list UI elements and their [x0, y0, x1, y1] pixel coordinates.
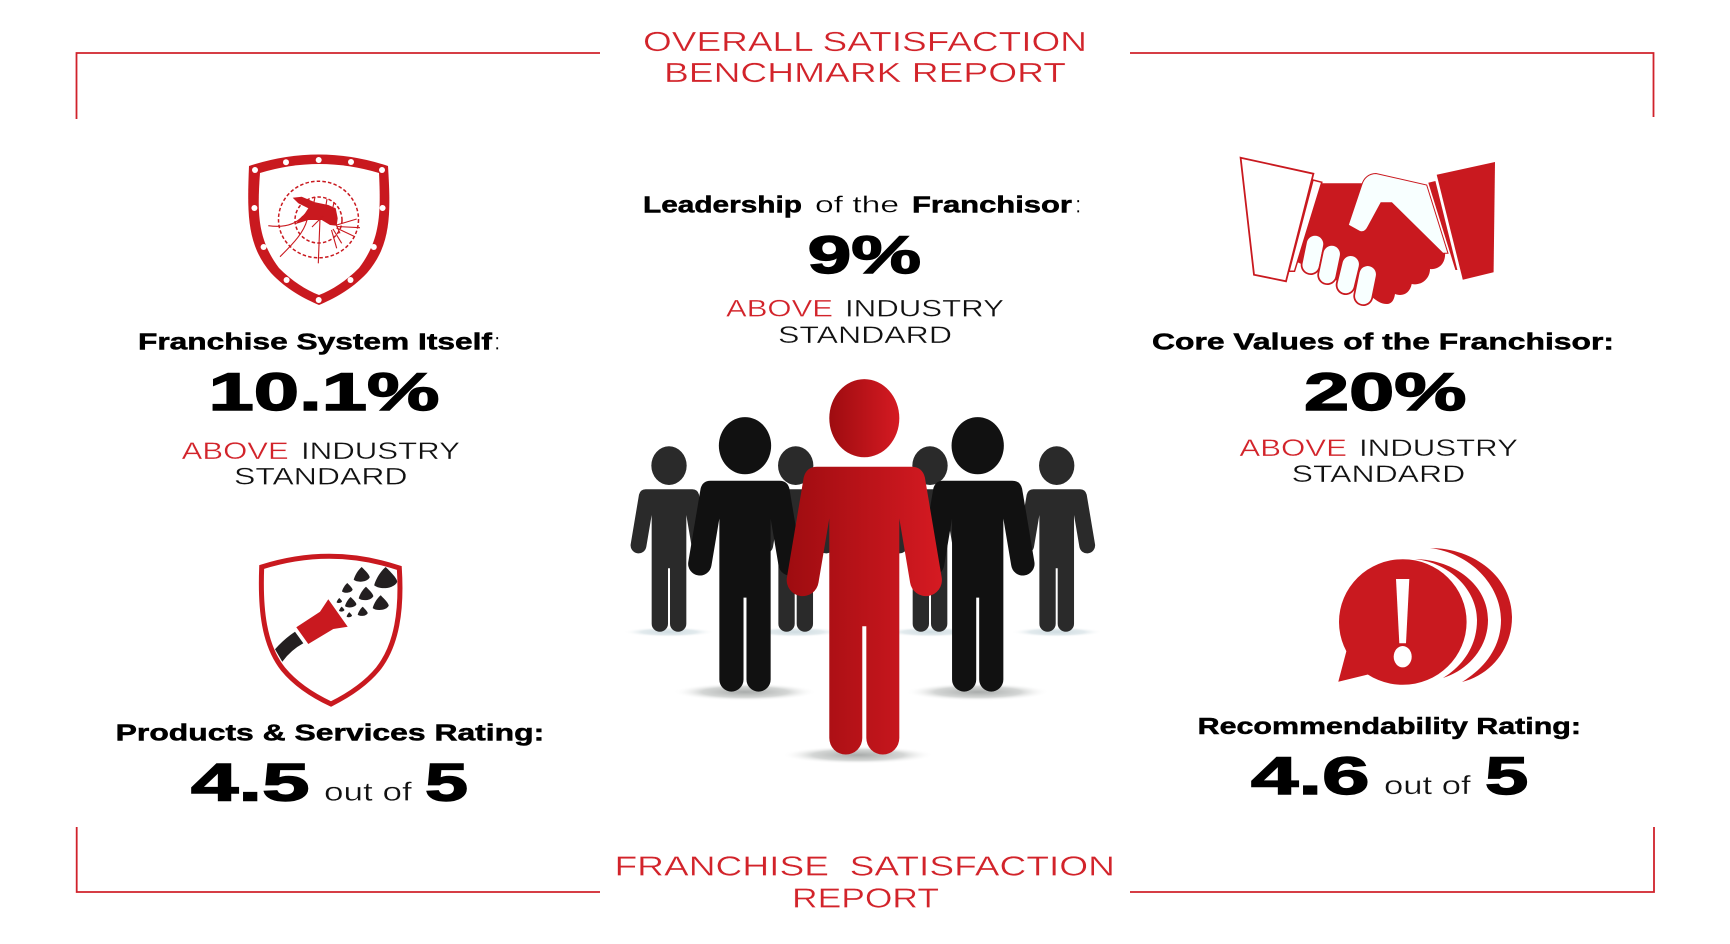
stat: core values of the franchisor: 20% — [1304, 363, 1466, 422]
stat: recommendability rating: out of — [1384, 770, 1472, 800]
title: overall satisfaction benchmark report — [643, 26, 1087, 88]
title: overall satisfaction benchmark report: BENCHMARK REPORT — [664, 57, 1066, 88]
stat: leadership of the franchisor: 9% — [808, 226, 921, 285]
stat: products and services rating: out of — [324, 776, 413, 806]
icon: handshake — [1241, 158, 1495, 304]
footer title: franchise satisfaction report: FRANCHISE SATISFACTION — [614, 851, 1115, 882]
footer title: franchise satisfaction report: REPORT — [792, 883, 939, 914]
stat: recommendability rating: 5 — [1485, 747, 1528, 806]
title: overall satisfaction benchmark report: OVERALL SATISFACTION — [643, 26, 1087, 57]
stat: core values of the franchisor: INDUSTRY — [1359, 435, 1518, 462]
stat: franchise system itself — [138, 328, 500, 490]
footer title: franchise satisfaction report — [614, 851, 1115, 914]
stat: recommendability rating — [1198, 713, 1581, 806]
stat: franchise system itself: 10.1% — [208, 363, 440, 422]
stat: leadership of the franchisor: ABOVE — [726, 296, 833, 322]
stat: core values of the franchisor: ABOVE — [1239, 435, 1347, 462]
stat: leadership of the franchisor: Leadership — [643, 192, 802, 218]
stat: core values of the franchisor: Core Values of the Franchisor: — [1152, 328, 1614, 354]
stat: leadership of the franchisor: INDUSTRY — [845, 296, 1004, 322]
bottom frame bracket — [77, 827, 1654, 892]
stat: products and services rating — [116, 720, 544, 812]
stat: leadership of the franchisor: STANDARD — [778, 322, 952, 349]
stat: products and services rating: 4.5 — [191, 754, 310, 812]
stat: leadership of the franchisor — [643, 192, 1081, 349]
stat: recommendability rating: 4.6 — [1251, 747, 1370, 806]
icon: speech bubble with exclamation mark — [1338, 548, 1512, 685]
stat: franchise system itself: Franchise System Itself — [138, 328, 492, 354]
stat: leadership of the franchisor: Franchisor — [912, 192, 1072, 218]
icon: shield with spraying nozzle — [261, 556, 400, 704]
stat: core values of the franchisor — [1152, 328, 1614, 488]
stat: franchise system itself: ABOVE — [182, 438, 289, 465]
illustration: group of people with red leader — [623, 379, 1103, 764]
stat: franchise system itself: : — [494, 328, 500, 354]
stat: leadership of the franchisor: of the — [815, 192, 899, 218]
stat: products and services rating: Products & Services Rating: — [116, 720, 544, 746]
stat: products and services rating: 5 — [425, 754, 468, 812]
stat: core values of the franchisor: STANDARD — [1292, 461, 1465, 488]
top frame bracket — [76, 53, 1654, 119]
stat: leadership of the franchisor: : — [1075, 192, 1081, 218]
stat: franchise system itself: STANDARD — [234, 464, 408, 490]
icon: shield with mosquito — [248, 154, 389, 305]
stat: recommendability rating: Recommendability Rating: — [1198, 713, 1581, 739]
stat: franchise system itself: INDUSTRY — [301, 438, 460, 465]
